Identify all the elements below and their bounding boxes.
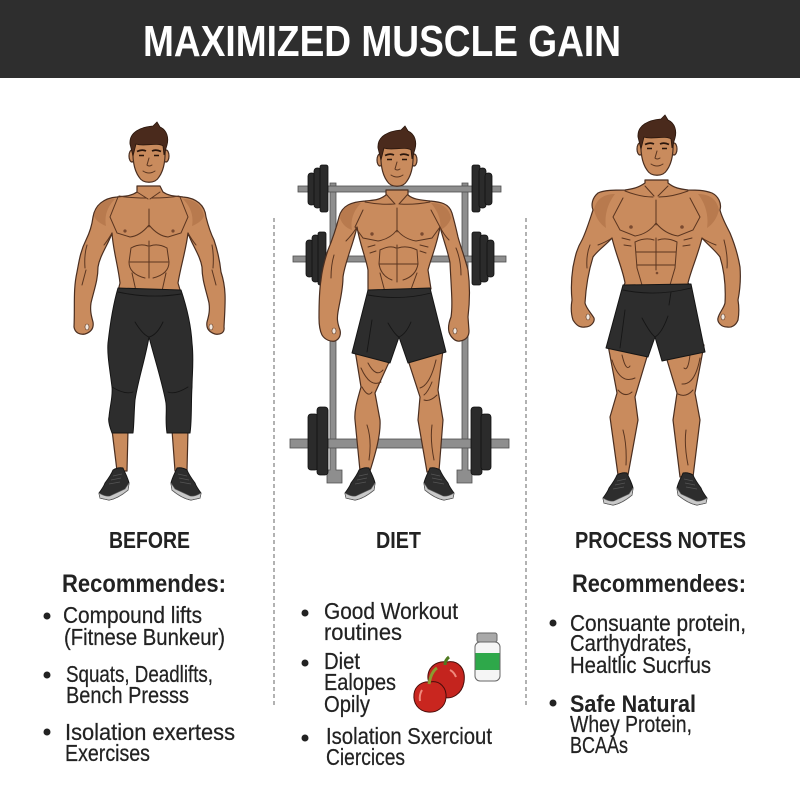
text block: process notes list: BCAAs <box>570 732 628 758</box>
text block: before list: Compound lifts <box>63 602 202 628</box>
shorts <box>606 284 705 361</box>
text block: diet list: Good Workout <box>324 598 458 624</box>
barbell bars <box>290 186 509 448</box>
legs <box>112 430 188 471</box>
header band <box>0 0 800 78</box>
torso and arms <box>319 190 470 341</box>
leg muscle lines <box>612 355 700 465</box>
icon: supplement bottle <box>475 633 500 681</box>
head: process notes <box>637 115 677 175</box>
text block: diet list: Isolation Sxerciout <box>326 723 492 749</box>
text block: process notes list: Whey Protein, <box>570 711 692 737</box>
legs <box>355 350 443 472</box>
text block: process notes list: Safe Natural <box>570 691 696 718</box>
text block: before list: Squats, Deadlifts, <box>66 661 213 687</box>
text block: process notes list <box>550 570 746 758</box>
column heading: before: BEFORE <box>109 527 190 553</box>
text block: diet list: Opily <box>324 691 370 717</box>
shoes <box>99 468 201 500</box>
text block: before list: Exercises <box>65 740 150 766</box>
weight rack <box>290 165 509 483</box>
figure: process notes <box>571 180 740 505</box>
text block: diet list: Diet <box>324 648 360 674</box>
torso and arms <box>571 180 740 327</box>
text block: diet list: routines <box>324 619 402 645</box>
torso and arms <box>74 186 225 334</box>
column heading: process notes: PROCESS NOTES <box>575 527 746 553</box>
leg muscle lines <box>361 360 437 460</box>
compression tights <box>108 288 193 433</box>
text block: process notes list: Carthydrates, <box>570 630 692 656</box>
text block: before list: Recommendes: <box>62 570 226 598</box>
shoes <box>345 468 454 500</box>
weight plates <box>306 165 494 475</box>
muscle shading <box>340 203 451 230</box>
icon: red peppers <box>414 657 464 712</box>
column heading: diet: DIET <box>376 527 421 553</box>
text block: process notes list: Healtlic Sucrfus <box>570 652 711 678</box>
muscle shading <box>94 199 204 226</box>
text block: before list: Bench Presss <box>66 682 189 708</box>
muscle lines <box>82 192 216 291</box>
figure: before <box>74 186 225 500</box>
shoes <box>603 473 707 505</box>
text block: process notes list: Consuante protein, <box>570 610 746 636</box>
figure: diet <box>319 190 470 500</box>
rack uprights <box>327 183 472 483</box>
title: MAXIMIZED MUSCLE GAIN <box>143 17 621 66</box>
text block: before list: Isolation exertess <box>65 719 235 745</box>
text block: diet list <box>302 598 492 770</box>
legs <box>608 345 704 477</box>
shorts <box>352 288 446 363</box>
text block: process notes list: Recommendees: <box>572 570 746 598</box>
head: diet <box>377 126 417 186</box>
text block: before list: (Fitnese Bunkeur) <box>64 624 225 650</box>
text block: diet list: Ealopes <box>324 669 396 695</box>
muscle lines <box>331 194 461 292</box>
head: before <box>129 122 169 182</box>
muscle lines <box>587 186 727 285</box>
muscle shading <box>594 194 719 228</box>
text block: before list <box>44 570 235 766</box>
text block: diet list: Ciercices <box>326 744 405 770</box>
